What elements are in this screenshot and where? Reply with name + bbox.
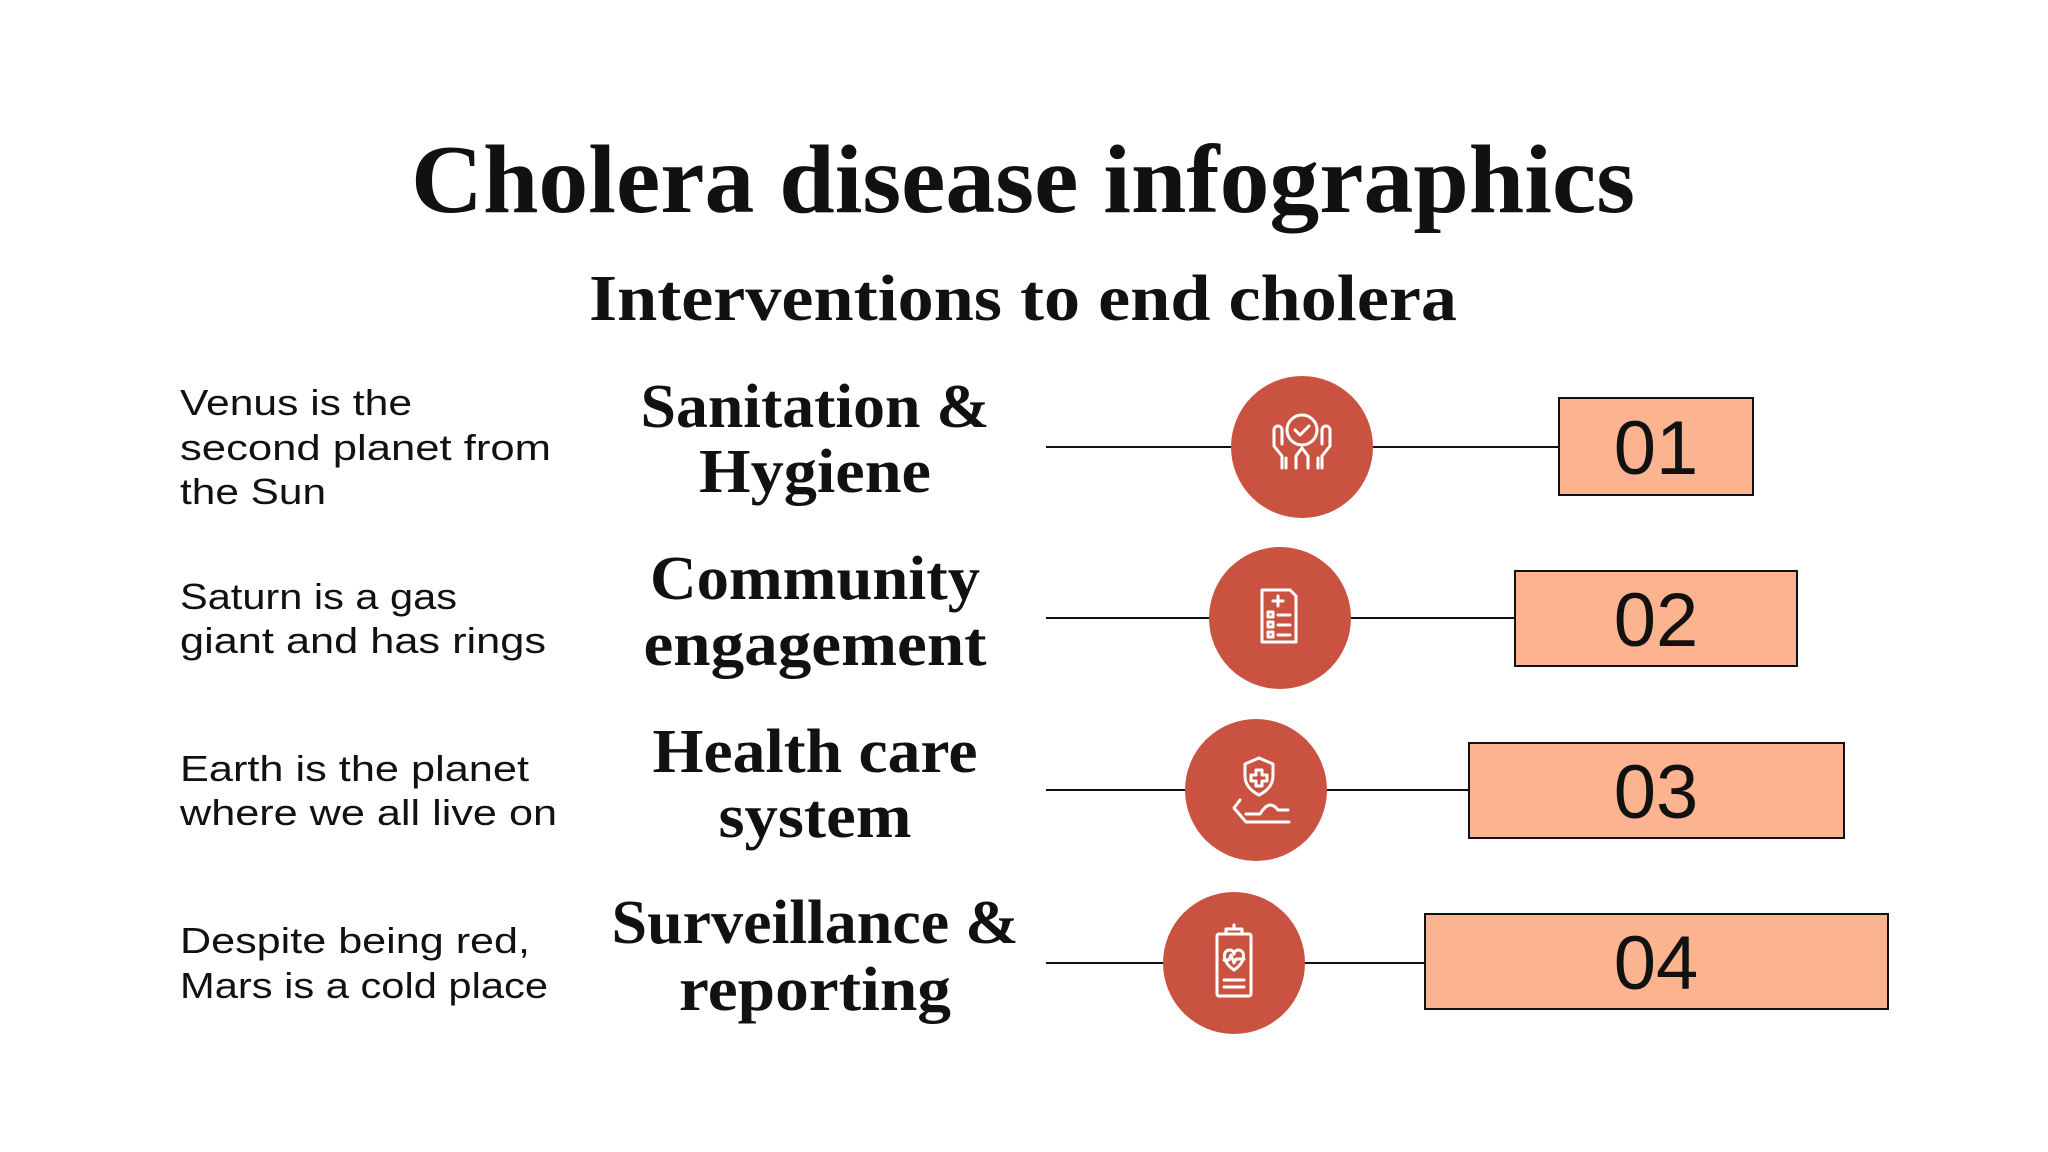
description 1: second planet from (180, 427, 551, 468)
description 1 (180, 382, 551, 512)
icon circle 2: checklist (1209, 547, 1351, 689)
connector line 1 (1046, 446, 1559, 448)
heading 3: system (718, 783, 912, 851)
description 3: where we all live on (179, 792, 557, 833)
description 4: Mars is a cold place (180, 965, 548, 1006)
number box 04: 04 (1614, 921, 1698, 1006)
row 4 (180, 889, 1888, 1034)
heading 1: Hygiene (699, 438, 931, 506)
heading 1 (640, 373, 990, 506)
number box 03: 03 (1614, 750, 1698, 835)
heading 4 (612, 889, 1018, 1024)
description 4 (180, 920, 548, 1006)
number box 01: 01 (1614, 406, 1698, 491)
subtitle: Interventions to end cholera (589, 262, 1457, 335)
heading 2: Community (650, 545, 980, 613)
description 2 (180, 576, 546, 661)
heading 3 (652, 718, 978, 851)
description 2: giant and has rings (180, 620, 546, 661)
heading 2 (644, 545, 987, 679)
heading 4: Surveillance & (612, 889, 1018, 957)
title: Cholera disease infographics (411, 126, 1635, 234)
description 1: the Sun (180, 471, 326, 512)
row 3 (179, 718, 1844, 861)
icon circle 1: hands with check (1231, 376, 1373, 518)
number box 04 (1425, 914, 1888, 1009)
row 1 (180, 373, 1753, 518)
description 4: Despite being red, (180, 920, 530, 961)
description 2: Saturn is a gas (180, 576, 457, 617)
connector line 3 (1046, 789, 1469, 791)
number box 01 (1559, 398, 1753, 495)
icon circle 3: shield on hand (1185, 719, 1327, 861)
number box 02: 02 (1614, 578, 1698, 663)
row 2 (180, 545, 1797, 689)
number box 02 (1515, 571, 1797, 666)
heading 2: engagement (644, 611, 987, 679)
heading 3: Health care (652, 718, 978, 786)
heading 4: reporting (679, 956, 951, 1024)
connector line 2 (1046, 617, 1515, 619)
description 1: Venus is the (180, 382, 412, 423)
heading 1: Sanitation & (640, 373, 990, 441)
description 3: Earth is the planet (180, 748, 529, 789)
icon circle 4: clipboard with heart (1163, 892, 1305, 1034)
number box 03 (1469, 743, 1844, 838)
connector line 4 (1046, 962, 1425, 964)
description 3 (179, 748, 557, 833)
